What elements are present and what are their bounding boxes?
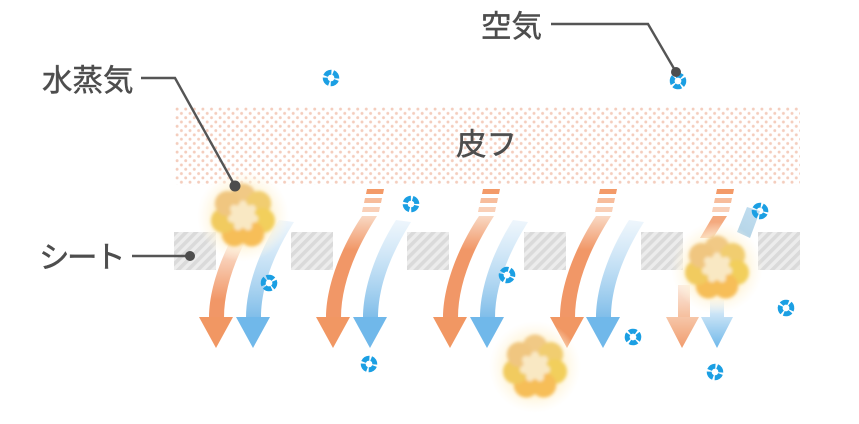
label: air <box>481 10 681 77</box>
panel: sheet blocks <box>174 232 800 270</box>
arrow pair 1 <box>199 216 294 348</box>
skin label: 皮フ <box>456 128 517 162</box>
arrow pair 3 <box>433 189 528 348</box>
label: air: 空気 <box>481 10 542 44</box>
label: sheet <box>39 241 195 275</box>
arrow pair 4 <box>550 189 644 348</box>
panel: skin layer <box>175 107 800 185</box>
label: water vapor <box>42 64 240 192</box>
label: water vapor: 水蒸気 <box>42 64 134 98</box>
arrow pair 2 <box>316 189 411 348</box>
air particles <box>261 71 794 379</box>
arrow pair 5 blocked by water vapor <box>666 189 760 348</box>
label: sheet: シート <box>39 241 123 275</box>
water vapor particle blocked at sheet <box>671 222 763 314</box>
water vapor particle on sheet left <box>197 170 289 262</box>
water vapor particle below sheet <box>489 321 581 413</box>
